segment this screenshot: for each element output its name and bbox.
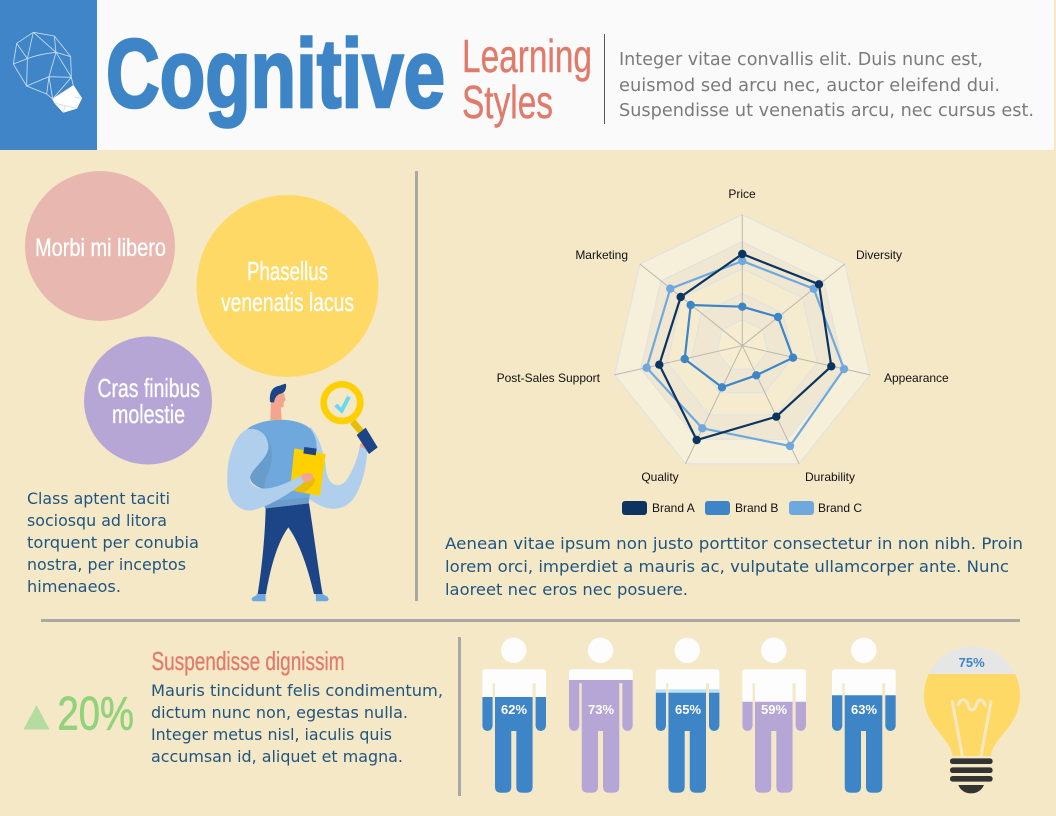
bottom text block: Integer metus nisl, iaculis quis [151,725,392,744]
icon: light bulb 75%: 75% [959,655,985,670]
subtitle [462,30,592,128]
circle: Phasellus venenatis lacus: Phasellus [247,256,328,286]
pictogram: 62%: 62% [501,702,527,717]
chart legend [622,501,862,515]
Brand A series [655,250,836,444]
header description: Integer vitae convallis elit. Duis nunc est, [619,49,983,70]
heading: Suspendisse dignissim: Suspendisse dignissim [152,646,344,676]
circle: Morbi mi libero [25,171,175,321]
subtitle: Styles [462,76,553,128]
bottom text block: dictum nunc non, egestas nulla. [151,703,408,722]
stat: 20 percent: 20% [58,686,134,740]
right text block: Aenean vitae ipsum non justo porttitor consectetur in non nibh. Proin [445,534,1023,553]
right text block: laoreet nec eros nec posuere. [445,580,688,599]
radar grid [614,215,870,464]
header band [0,0,1054,150]
chart legend: Brand B [735,501,778,515]
radar axis labels: Quality [641,470,679,484]
left text block [27,489,199,596]
left text block: sociosqu ad litora [27,511,167,530]
pictogram: 59% [742,638,806,793]
circle: Cras finibus molestie [84,336,212,464]
chart legend: Brand A [652,501,695,515]
circle: Phasellus venenatis lacus [196,195,378,377]
bottom text block [151,681,443,766]
header description: Suspendisse ut venenatis arcu, nec cursus est. [619,100,1034,121]
left text block: torquent per conubia [27,533,199,552]
pictogram: 63% [832,638,896,793]
Brand C series [642,257,848,450]
right text block: lorem orci, imperdiet a mauris ac, vulputate ullamcorper ante. Nunc [445,557,1009,576]
title: Cognitive [106,19,445,128]
right text block [445,534,1023,599]
header description: euismod sed arcu nec, auctor eleifend dui. [619,75,1000,96]
pictogram: 59%: 59% [761,702,787,717]
radar axis labels: Appearance [884,371,949,385]
stat: 20 percent [24,686,134,740]
radar axis labels: Price [728,187,756,201]
subtitle: Learning [462,30,592,82]
icon: wireframe brain bulb logo [13,32,82,112]
pictogram: 73%: 73% [588,702,614,717]
pictogram: 63%: 63% [851,702,877,717]
header description [619,49,1034,121]
left text block: nostra, per inceptos [27,555,186,574]
circle: Phasellus venenatis lacus: venenatis lacus [221,287,354,317]
radar axis labels: Diversity [856,248,902,262]
bottom text block: accumsan id, aliquet et magna. [151,747,403,766]
radar axis labels: Durability [805,470,855,484]
bottom text block: Mauris tincidunt felis condimentum, [151,681,443,700]
chart legend: Brand C [818,501,862,515]
left text block: Class aptent taciti [27,489,170,508]
circle: Morbi mi libero: Morbi mi libero [35,234,166,262]
circle: Cras finibus molestie: Cras finibus [98,373,200,403]
radar axis labels: Marketing [575,248,628,262]
pictogram: 62% [482,638,546,793]
pictogram: 65% [656,638,719,793]
illustration: man with clipboard and magnifier [227,384,378,601]
pictogram: 65%: 65% [675,702,701,717]
radar axis labels [497,187,949,484]
pictogram: 73% [569,638,633,793]
Brand B series [680,301,797,391]
left text block: himenaeos. [27,577,121,596]
icon: light bulb 75% [924,647,1020,793]
radar axis labels: Post-Sales Support [497,371,601,385]
icon: up triangle [24,705,50,730]
radar chart [497,187,949,484]
circle: Cras finibus molestie: molestie [112,399,185,429]
